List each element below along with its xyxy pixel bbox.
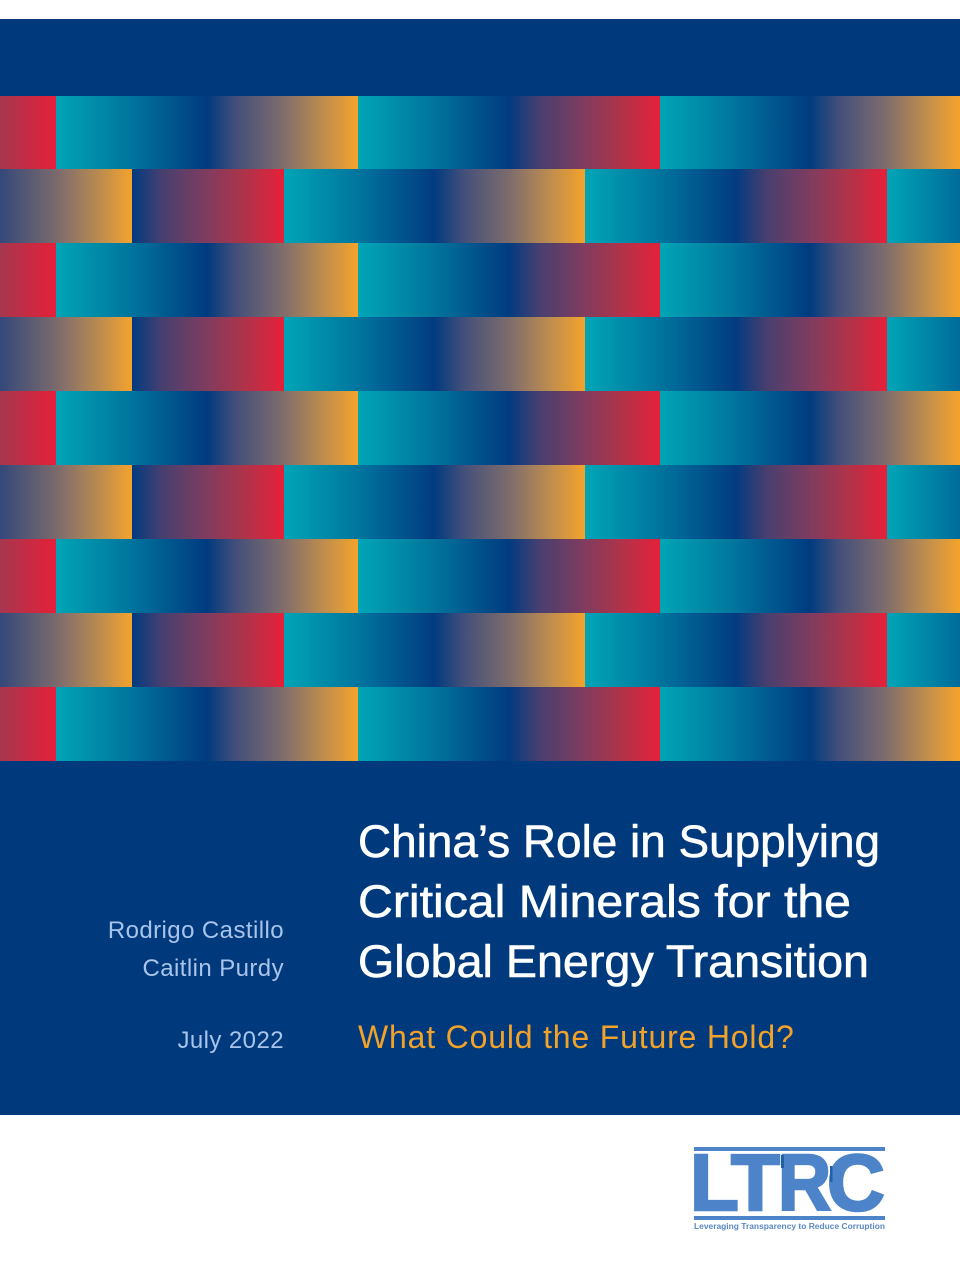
logo: LTRC [690,1144,885,1231]
subtitle: What Could the Future Hold? [358,1019,795,1055]
woven gradient pattern [0,96,960,761]
logo: LTRC: Leveraging Transparency to Reduce Corruption [694,1222,885,1231]
author: Rodrigo Castillo: Rodrigo Castillo [108,917,284,944]
title: China’s Role in Supplying [358,816,880,867]
title: Critical Minerals for the [358,876,851,927]
date: July 2022 [177,1027,284,1054]
title [358,816,880,987]
author: Caitlin Purdy: Caitlin Purdy [142,955,284,982]
title: Global Energy Transition [358,936,869,987]
